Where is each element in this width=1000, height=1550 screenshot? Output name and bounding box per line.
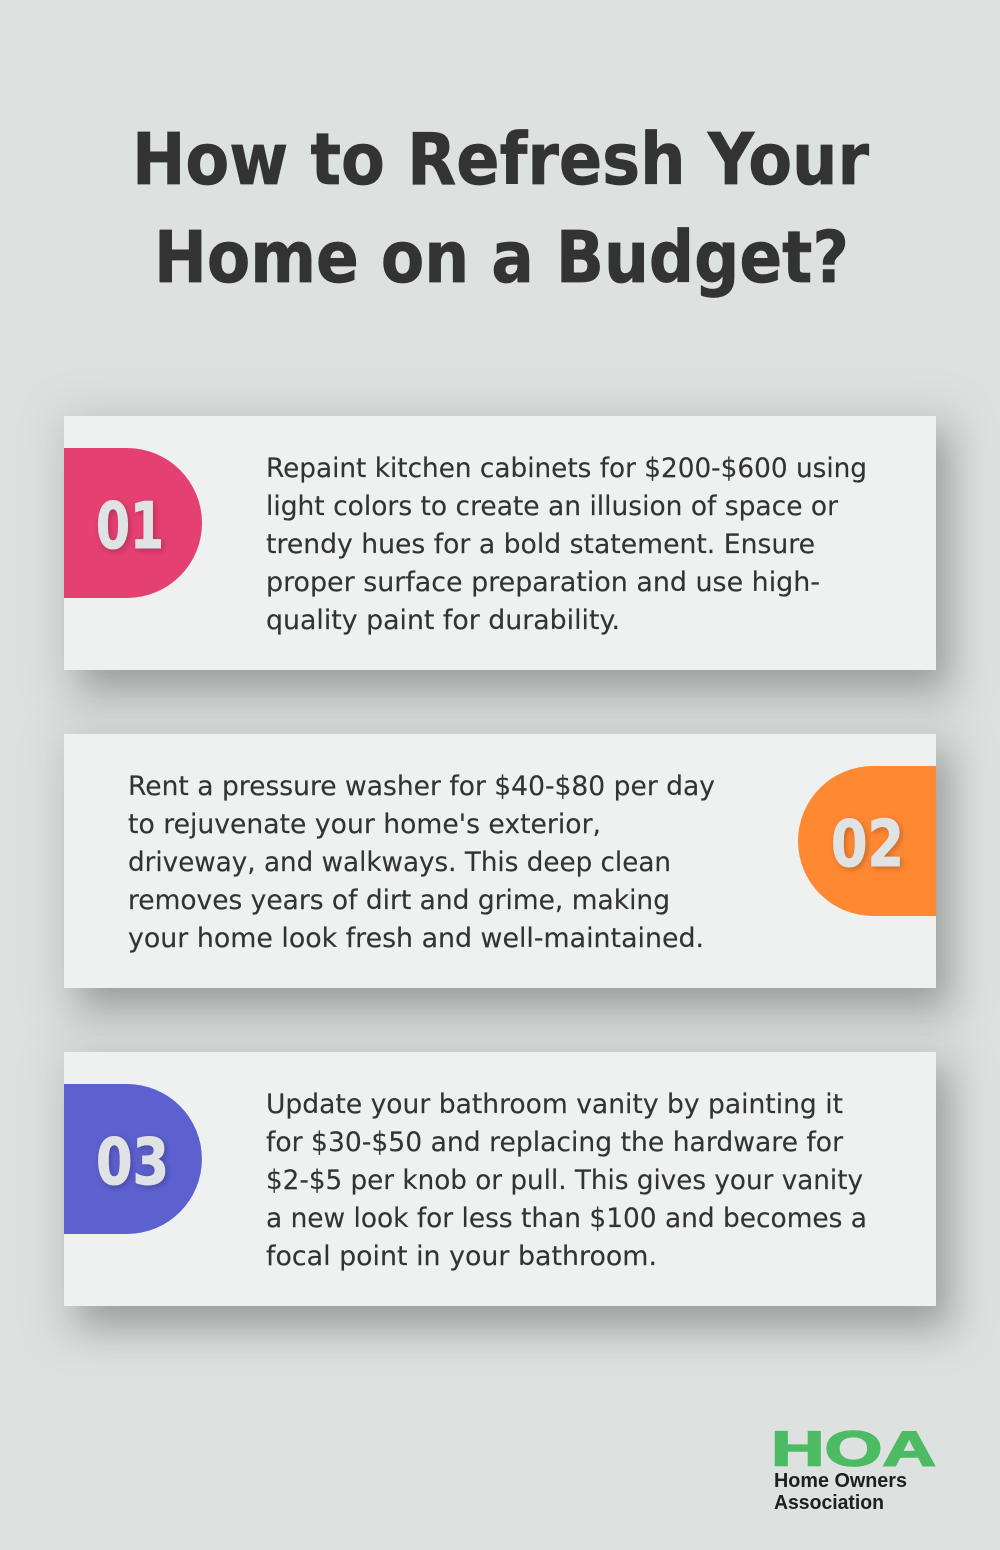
text: step 2 description: Rent a pressure washer for $40-$80 per day <box>128 771 715 802</box>
title: Home on a Budget? <box>154 216 849 299</box>
text: step 1 description: light colors to create an illusion of space or <box>266 491 839 522</box>
badge: 01: 01 <box>96 490 164 564</box>
title <box>132 118 869 299</box>
text: step 2 description: driveway, and walkways. This deep clean <box>128 847 671 878</box>
text: step 1 description: quality paint for durability. <box>266 605 620 636</box>
text: step 1 description: trendy hues for a bold statement. Ensure <box>266 529 815 560</box>
text: step 1 description: proper surface preparation and use high- <box>266 567 820 598</box>
badge: 02 <box>798 766 936 916</box>
logo: HOA Home Owners Association: Home Owners <box>774 1470 907 1492</box>
badge: 01 <box>64 448 202 598</box>
text: step 1 description: Repaint kitchen cabinets for $200-$600 using <box>266 453 867 484</box>
text: step 2 description: removes years of dirt and grime, making <box>128 885 670 916</box>
logo: HOA Home Owners Association: HOA <box>771 1422 936 1476</box>
text: step 3 description: focal point in your bathroom. <box>266 1241 657 1272</box>
text: step 3 description: Update your bathroom vanity by painting it <box>266 1089 843 1120</box>
badge: 03 <box>64 1084 202 1234</box>
panel: step 1 <box>48 400 968 710</box>
text: step 3 description <box>266 1089 867 1272</box>
text: step 3 description: a new look for less than $100 and becomes a <box>266 1203 867 1234</box>
text: step 1 description <box>266 453 867 636</box>
logo: HOA Home Owners Association <box>771 1422 936 1514</box>
panel: step 3 <box>48 1036 968 1346</box>
logo: HOA Home Owners Association: Association <box>774 1492 884 1514</box>
text: step 2 description: to rejuvenate your home's exterior, <box>128 809 601 840</box>
text: step 3 description: $2-$5 per knob or pull. This gives your vanity <box>266 1165 863 1196</box>
title: How to Refresh Your <box>132 118 869 201</box>
panel: step 2 <box>48 718 968 1028</box>
text: step 2 description: your home look fresh and well-maintained. <box>128 923 704 954</box>
badge: 02: 02 <box>831 808 904 882</box>
text: step 2 description <box>128 771 715 954</box>
text: step 3 description: for $30-$50 and replacing the hardware for <box>266 1127 844 1158</box>
badge: 03: 03 <box>96 1126 169 1200</box>
